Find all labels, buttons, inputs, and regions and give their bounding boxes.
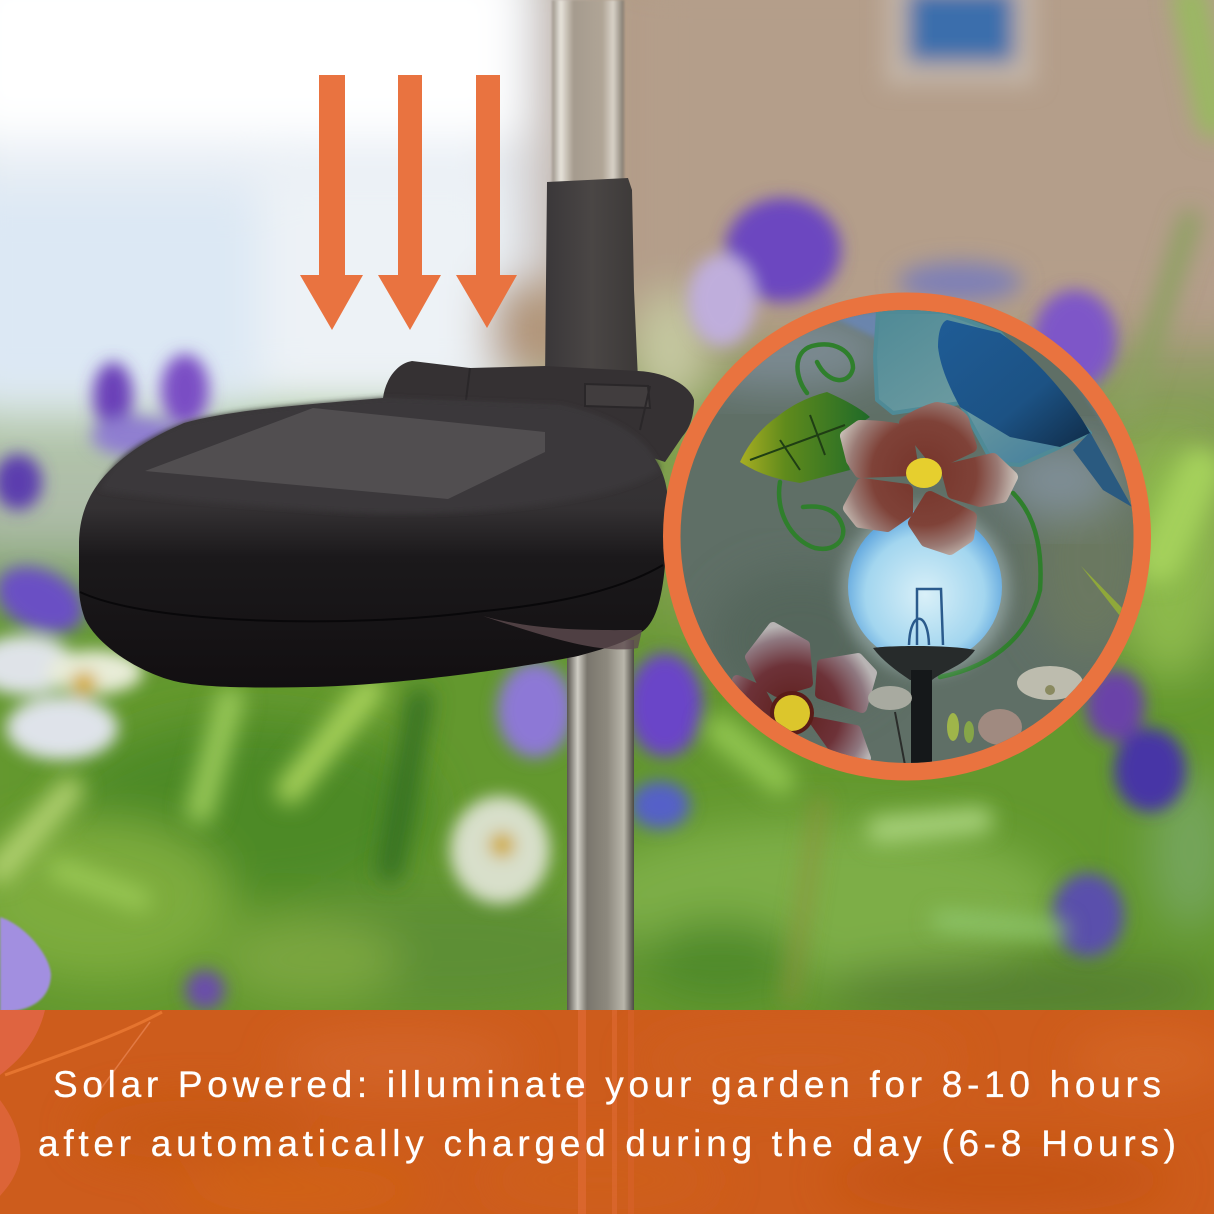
solar panel (145, 408, 545, 499)
orange caption banner (0, 1010, 1214, 1214)
lower flower (737, 627, 872, 760)
metal pole (552, 0, 634, 1012)
caption line 2: after automatically charged during the day (6-8 Hours) (38, 1123, 1176, 1164)
bird (875, 312, 1132, 507)
inset circle: lit glass globe (663, 292, 1151, 780)
pole collar (545, 178, 638, 380)
blurred window (885, 0, 1035, 302)
flower centre (906, 458, 942, 488)
curl stems (779, 344, 1041, 677)
red metal flower (846, 408, 1012, 549)
bracket joints (466, 368, 650, 430)
blurred purple pansies (0, 198, 1186, 1010)
leaf (740, 392, 870, 483)
foreground petal (0, 917, 51, 1012)
solar light unit (79, 178, 694, 688)
lower reflection (483, 616, 642, 649)
glass globe (841, 506, 1009, 770)
housing seam (80, 565, 663, 621)
housing top face (100, 398, 660, 513)
caption line 1: Solar Powered: illuminate your garden for 8-10 hours (53, 1064, 1161, 1105)
housing body (79, 398, 667, 688)
mounting bracket (383, 361, 694, 462)
orange sun arrows (300, 75, 517, 330)
small daisies and buds (868, 566, 1122, 765)
lower flower centre (774, 695, 810, 731)
